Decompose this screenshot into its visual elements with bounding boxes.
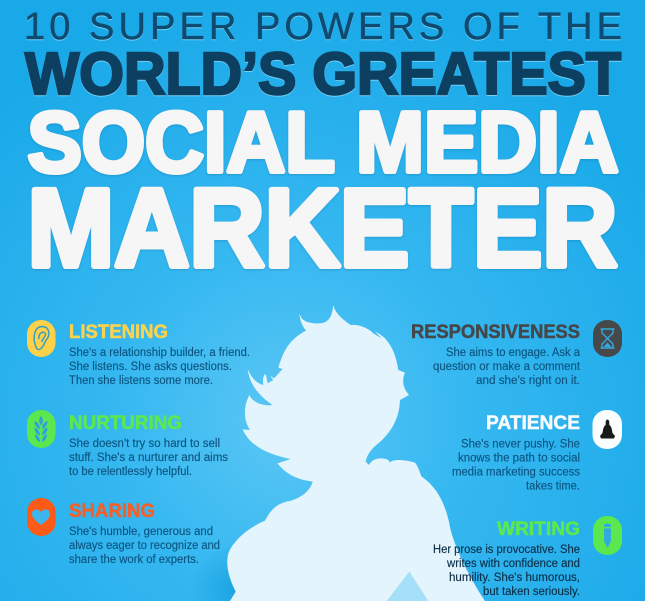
text: nurturing — [69, 438, 228, 478]
heading: writing: WRITING — [497, 519, 580, 540]
text: listening — [69, 347, 250, 387]
title line 4: MARKETER — [28, 167, 618, 290]
text: nurturing: She doesn't try so hard to sell — [69, 438, 220, 450]
icon: hourglass — [593, 320, 622, 357]
text: patience: knows the path to social — [458, 452, 580, 464]
icon: wheat — [27, 410, 56, 448]
text: nurturing: stuff. She's a nurturer and aims — [69, 452, 228, 464]
shadow beside silhouette — [190, 545, 280, 601]
text: patience: takes time. — [526, 480, 580, 492]
text: listening: She listens. She asks questions. — [69, 361, 232, 373]
icon: meditating figure — [592, 410, 622, 449]
text: sharing: share the work of experts. — [69, 554, 199, 566]
heading: nurturing: NURTURING — [69, 413, 182, 434]
text: writing: humility. She's humorous, — [449, 572, 580, 584]
title line 2: WORLD’S GREATEST — [25, 41, 621, 107]
panel: responsiveness — [411, 320, 622, 387]
text: patience: media marketing success — [452, 466, 580, 478]
title line 3: SOCIAL MEDIA — [28, 96, 618, 190]
text: responsiveness: She aims to engage. Ask a — [446, 347, 581, 359]
heading: sharing: SHARING — [69, 501, 155, 522]
panel: writing — [433, 516, 622, 598]
text: patience — [452, 438, 580, 492]
text: responsiveness: question or make a comment — [433, 361, 581, 373]
text: writing: writes with confidence and — [446, 558, 580, 570]
text: writing: Her prose is provocative. She — [433, 544, 580, 556]
panel: nurturing — [27, 410, 228, 478]
text: sharing: She's humble, generous and — [69, 526, 213, 538]
text: responsiveness: and she's right on it. — [476, 375, 580, 387]
silhouette of marketer — [227, 305, 485, 601]
text: patience: She's never pushy. She — [461, 438, 580, 450]
icon: ear — [27, 320, 56, 357]
panel: listening — [27, 320, 250, 387]
icon: pencil — [593, 516, 622, 555]
text: sharing — [69, 526, 220, 566]
text: responsiveness — [433, 347, 581, 387]
heading: listening: LISTENING — [69, 322, 168, 343]
panel: sharing — [27, 498, 220, 566]
panel: patience — [452, 410, 622, 492]
text: writing — [433, 544, 580, 598]
heading: responsiveness: RESPONSIVENESS — [411, 322, 580, 343]
title line 1: 10 SUPER POWERS OF THE — [24, 6, 622, 48]
text: nurturing: to be relentlessly helpful. — [69, 466, 192, 478]
text: listening: Then she listens some more. — [69, 375, 213, 387]
text: writing: but taken seriously. — [483, 586, 580, 598]
title — [24, 6, 622, 290]
text: listening: She's a relationship builder, a friend. — [69, 347, 250, 359]
heading: patience: PATIENCE — [486, 413, 580, 434]
text: sharing: always eager to recognize and — [69, 540, 220, 552]
icon: heart — [27, 498, 56, 536]
